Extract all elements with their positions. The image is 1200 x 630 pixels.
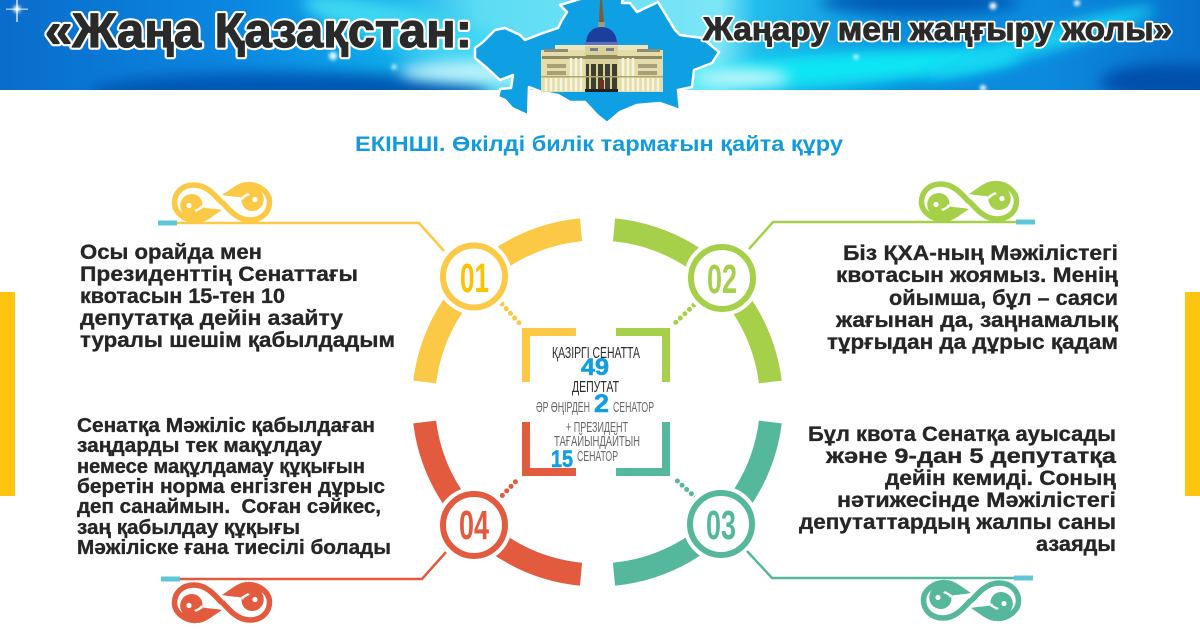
text block 04: немесе мақұлдамау құқығын xyxy=(77,456,365,478)
text block 01: туралы шешім қабылдадым xyxy=(80,328,395,352)
step 02: 02 xyxy=(707,256,737,302)
ring arcs xyxy=(425,230,770,574)
center statistics: ҚАЗІРГІ СЕНАТТА xyxy=(552,345,640,362)
text block 01: Президенттің Сенаттағы xyxy=(80,262,358,286)
center statistics: ТАҒАЙЫНДАЙТЫН xyxy=(554,432,640,450)
text block 03 xyxy=(799,422,1117,556)
right side bar xyxy=(1185,292,1200,496)
dotted connectors xyxy=(498,304,696,500)
map of Kazakhstan xyxy=(475,0,719,123)
center statistics: ӘР ӨҢІРДЕН xyxy=(536,399,590,416)
text block 02: тұрғыдан да дұрыс қадам xyxy=(827,330,1118,354)
text block 03: азаяды xyxy=(1036,532,1116,556)
step 01 xyxy=(436,238,512,314)
center statistics: 2 xyxy=(594,390,609,418)
text block 04: заң қабылдау құқығы xyxy=(77,517,300,539)
center statistics: 15 xyxy=(551,446,573,473)
center statistics: ДЕПУТАТ xyxy=(572,379,619,396)
text block 01: Осы орайда мен xyxy=(80,240,262,264)
leader line 04 xyxy=(161,552,446,582)
step 04 xyxy=(436,487,512,563)
palace illustration xyxy=(541,0,663,92)
text block 03: депутаттардың жалпы саны xyxy=(799,510,1116,534)
text block 02: Біз ҚХА-ның Мәжілістегі xyxy=(843,241,1118,265)
text block 02: ойымша, бұл – саяси xyxy=(889,286,1118,310)
step 02 xyxy=(684,240,760,316)
header banner xyxy=(0,0,1200,90)
text block 01 xyxy=(80,240,395,352)
title right: Жаңару мен жаңғыру жолы» xyxy=(702,11,1172,47)
step 04: 04 xyxy=(459,502,489,548)
leader line 01 xyxy=(158,220,444,251)
ornament yellow xyxy=(174,182,270,223)
text block 04: заңдарды тек мақұлдау xyxy=(77,435,323,457)
text block 02: квотасын жоямыз. Менің xyxy=(836,263,1118,287)
step 03 xyxy=(683,486,759,562)
text block 04: Мәжіліске ғана тиесілі болады xyxy=(77,537,391,559)
text block 01: квотасын 15-тен 10 xyxy=(80,284,285,308)
center corner brackets xyxy=(526,332,666,472)
text block 03: Бұл квота Сенатқа ауысады xyxy=(808,422,1116,446)
text block 04: беретін норма енгізген дұрыс xyxy=(77,476,385,498)
text block 03: дейін кемиді. Соның xyxy=(885,466,1116,490)
leader line 03 xyxy=(747,551,1033,580)
leader line 02 xyxy=(749,220,1035,249)
text block 03: нәтижесінде Мәжілістегі xyxy=(837,488,1116,512)
text block 04: деп санаймын. Соған сәйкес, xyxy=(77,496,381,518)
center statistics: СЕНАТОР xyxy=(613,399,654,416)
subheading: ЕКІНШІ. Өкілді билік тармағын қайта құру xyxy=(355,133,843,156)
center statistics xyxy=(536,345,654,473)
text block 01: депутатқа дейін азайту xyxy=(80,306,343,330)
text block 02: жағынан да, заңнамалық xyxy=(835,308,1118,332)
text block 03: және 9-дан 5 депутатқа xyxy=(825,444,1117,468)
ornament green xyxy=(922,181,1016,222)
center statistics: + ПРЕЗИДЕНТ xyxy=(566,419,628,436)
center statistics: СЕНАТОР xyxy=(577,448,618,465)
title right: Жаңару мен жаңғыру жолы» xyxy=(702,11,1172,47)
title left: «Жаңа Қазақстан: xyxy=(45,5,472,58)
text block 04: Сенатқа Мәжіліс қабылдаған xyxy=(77,415,375,437)
text block 04 xyxy=(77,415,391,559)
center statistics: 49 xyxy=(581,354,609,381)
step 03: 03 xyxy=(706,502,736,548)
left side bar xyxy=(0,292,15,496)
step 01: 01 xyxy=(460,255,489,301)
text block 02 xyxy=(827,241,1118,354)
ornament red xyxy=(174,582,270,623)
ornament teal xyxy=(924,580,1018,621)
title left: «Жаңа Қазақстан: xyxy=(45,5,472,58)
